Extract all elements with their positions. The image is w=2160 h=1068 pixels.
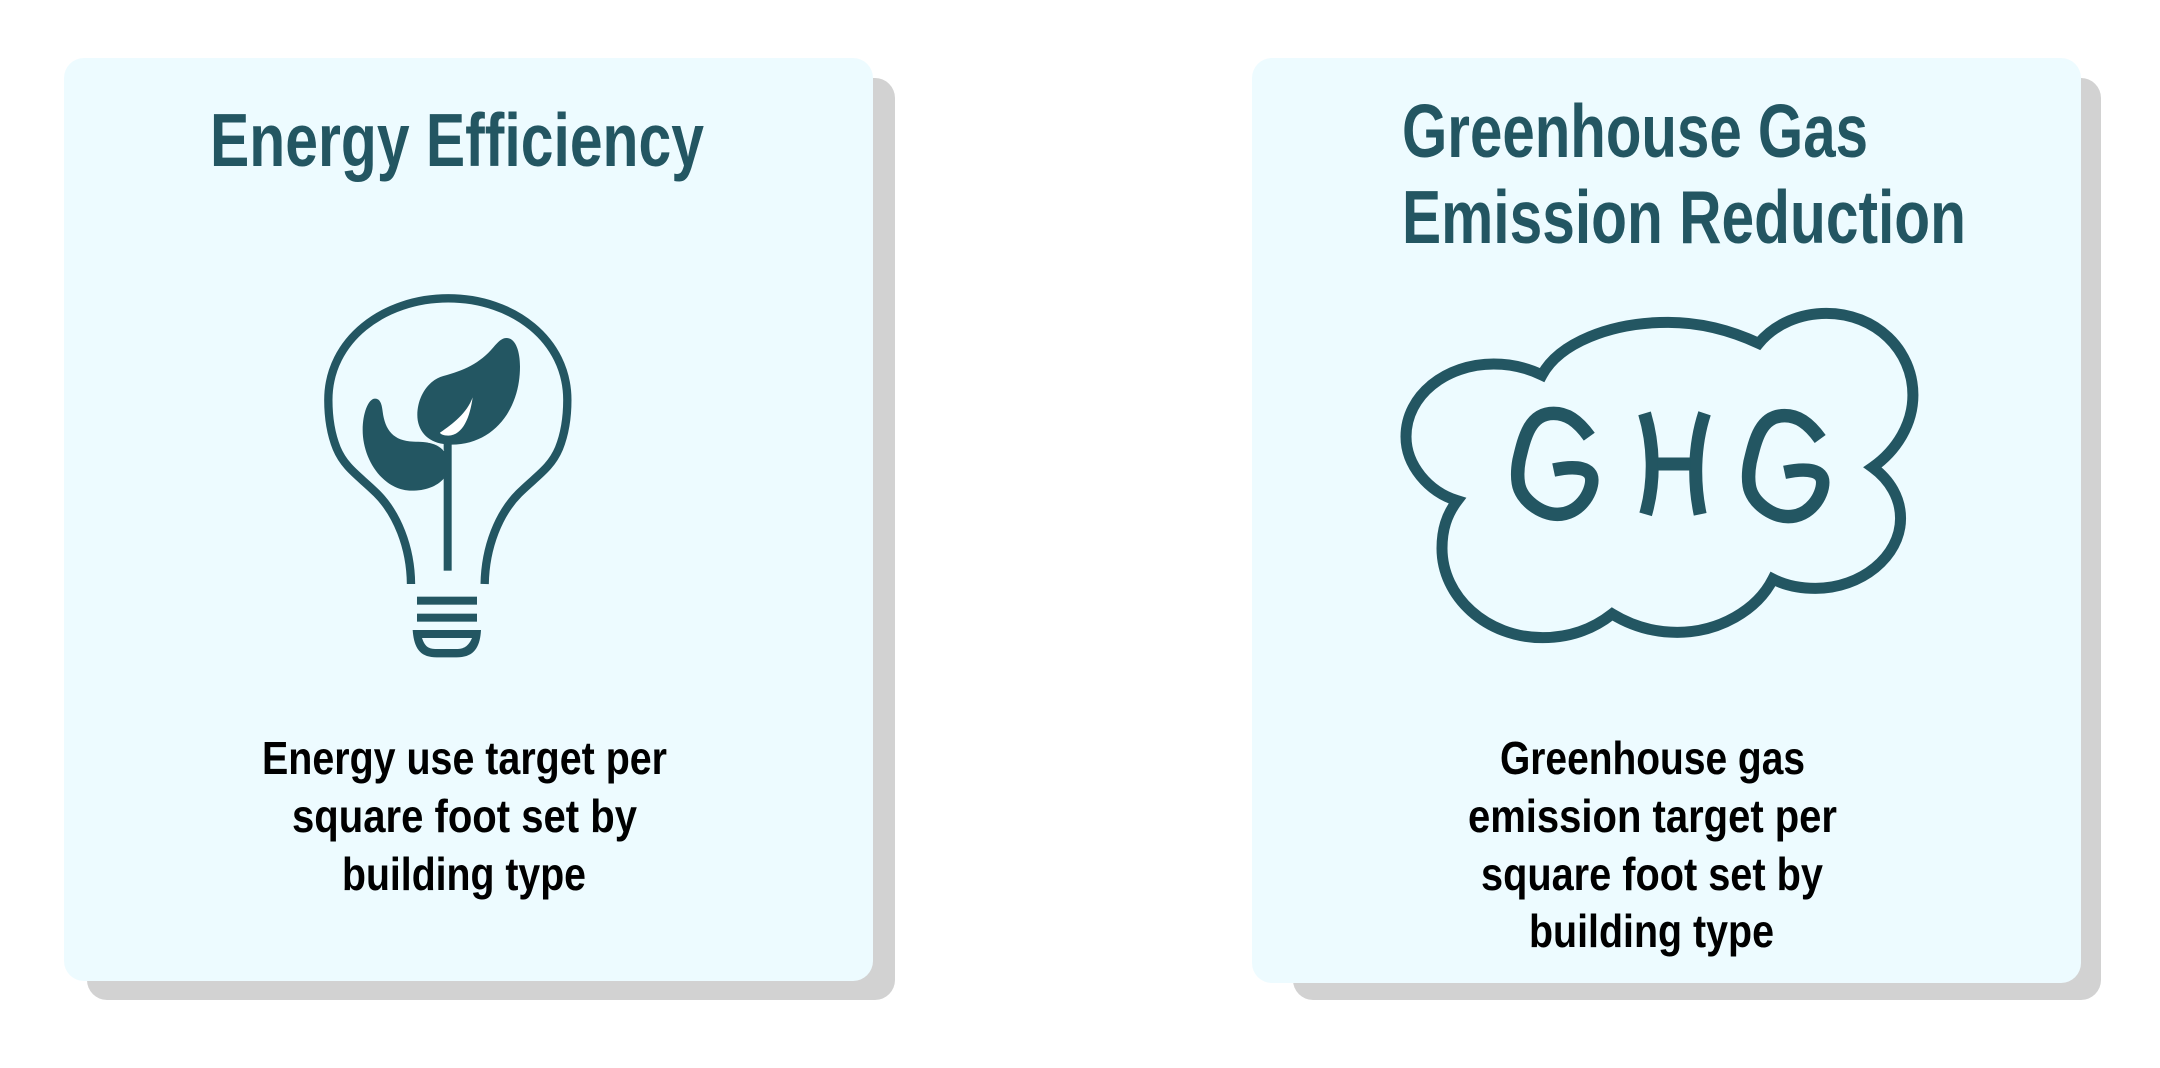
text block: emission target description: square foot set by <box>1481 848 1823 900</box>
heading: greenhouse gas emission reduction: Emission Reduction <box>1402 175 1966 259</box>
text block: energy target description: Energy use target per <box>262 732 667 784</box>
panel: greenhouse gas emission reduction <box>1252 58 2101 1000</box>
icon: light bulb with leaves <box>328 298 567 657</box>
heading: greenhouse gas emission reduction: Greenhouse Gas <box>1402 89 1868 173</box>
panel: energy efficiency <box>64 58 895 1000</box>
icon: GHG cloud <box>1406 313 1913 638</box>
card shadow <box>87 78 895 1000</box>
heading: greenhouse gas emission reduction <box>1402 89 1966 259</box>
text block: energy target description: square foot set by <box>292 790 637 842</box>
text block: emission target description: emission target per <box>1468 790 1837 842</box>
text block: energy target description <box>262 732 667 900</box>
heading: energy efficiency: Energy Efficiency <box>210 98 704 182</box>
card background <box>1252 58 2081 983</box>
text block: emission target description: building type <box>1529 905 1774 957</box>
card shadow <box>1293 78 2101 1000</box>
text block: emission target description: Greenhouse gas <box>1500 732 1805 784</box>
text block: energy target description: building type <box>342 848 586 900</box>
text block: emission target description <box>1468 732 1837 957</box>
card background <box>64 58 873 981</box>
